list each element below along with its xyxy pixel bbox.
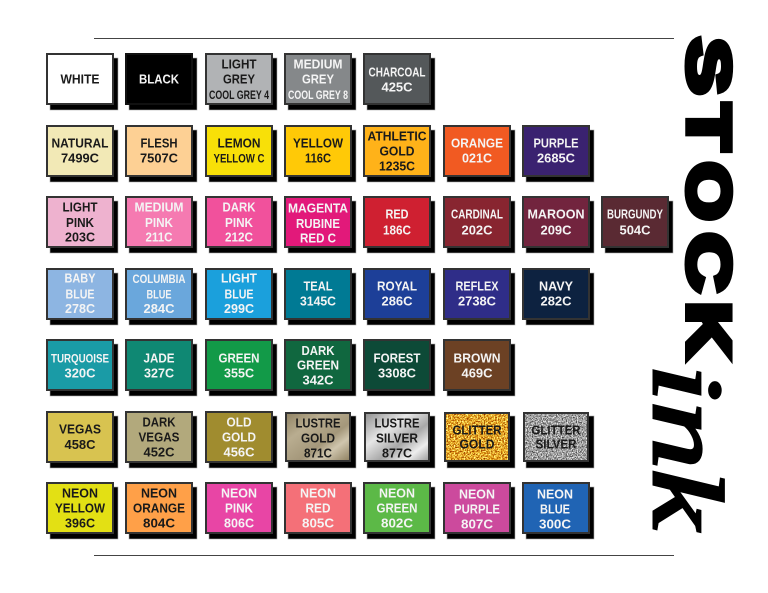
swatch: lustre silver: 877C [382, 446, 413, 460]
swatch: medium grey [285, 54, 356, 110]
swatch: dark pink: 212C [225, 230, 254, 244]
swatch: athletic gold [364, 126, 435, 182]
swatch: old gold: GOLD [222, 430, 256, 444]
swatch: royal: ROYAL [377, 278, 417, 294]
swatch: teal: TEAL [304, 278, 333, 294]
swatch: flesh [126, 126, 197, 182]
swatch: jade: 327C [144, 366, 175, 380]
wordmark: STOCK: T [675, 104, 742, 150]
wordmark: STOCK: K [675, 302, 742, 358]
swatch: neon blue [523, 483, 594, 539]
swatch: dark pink: PINK [225, 215, 254, 230]
swatch: neon green: 802C [381, 516, 414, 530]
swatch: neon purple: PURPLE [454, 502, 500, 516]
swatch: yellow [285, 126, 356, 182]
swatch: neon blue: BLUE [540, 502, 570, 516]
swatch: burgundy: 504C [620, 222, 651, 238]
swatch: athletic gold: GOLD [380, 144, 414, 158]
swatch: neon pink [206, 483, 277, 539]
swatch: light blue: BLUE [224, 286, 254, 302]
swatch: magenta rubine red [285, 197, 356, 253]
swatch: magenta rubine red: RED C [300, 230, 337, 246]
swatch: teal [285, 269, 356, 325]
swatch: neon blue: 300C [539, 516, 572, 532]
swatch: reflex: REFLEX [456, 278, 499, 294]
swatch: dark green: 342C [302, 372, 334, 388]
swatch: cardinal: 202C [462, 222, 493, 238]
swatch: neon orange: 804C [143, 516, 176, 530]
swatch: brown: BROWN [454, 350, 500, 366]
swatch: red: RED [386, 206, 408, 222]
wordmark: STOCK: O [675, 162, 741, 220]
swatch: medium grey: GREY [302, 72, 334, 86]
swatch: vegas: VEGAS [59, 422, 101, 436]
swatch: baby blue: 278C [65, 301, 96, 316]
swatch: neon purple: 807C [461, 516, 494, 532]
swatch: neon purple: NEON [459, 486, 495, 502]
swatch: orange [444, 126, 515, 182]
swatch: maroon: MAROON [528, 206, 584, 222]
swatch: baby blue: BLUE [66, 286, 95, 302]
swatch: glitter gold: GLITTER [452, 422, 502, 438]
swatch: old gold [206, 412, 277, 468]
swatch: red [364, 197, 435, 253]
swatch: light grey: COOL GREY 4 [209, 88, 269, 102]
wordmark: STOCK: S [675, 38, 742, 94]
swatch: yellow: 116C [305, 150, 332, 166]
swatch: dark pink [206, 197, 277, 253]
swatch: reflex [444, 269, 515, 325]
swatch: purple [523, 126, 594, 182]
swatch: burgundy [602, 197, 673, 253]
swatch: cardinal: CARDINAL [451, 206, 503, 222]
swatch: neon pink: 806C [224, 516, 255, 530]
swatch: columbia blue: BLUE [146, 288, 172, 302]
swatch: forest: FOREST [374, 350, 421, 366]
swatch: yellow: YELLOW [293, 136, 344, 150]
swatch: neon red: NEON [300, 486, 336, 500]
swatch: glitter silver: GLITTER [532, 422, 581, 438]
swatch: medium pink: PINK [145, 215, 174, 230]
swatch: jade: JADE [144, 350, 175, 366]
swatch: columbia blue: 284C [144, 301, 175, 316]
bottom rule [94, 555, 674, 556]
swatch: dark green: GREEN [297, 358, 339, 372]
swatch: neon green: NEON [379, 486, 415, 500]
swatch: medium pink: 211C [146, 230, 173, 244]
swatch: lustre gold: 871C [304, 446, 333, 460]
swatch: lustre silver [365, 413, 435, 468]
swatch: glitter gold [445, 413, 515, 468]
swatch: jade [126, 340, 197, 396]
swatch: royal [364, 269, 435, 325]
top rule [94, 38, 674, 39]
swatch: light blue: 299C [224, 301, 255, 316]
swatch: light pink: 203C [65, 230, 96, 244]
swatch: vegas: 458C [64, 437, 96, 452]
swatch: neon yellow: 396C [65, 516, 96, 530]
swatch: natural [47, 126, 118, 182]
swatch: forest [364, 340, 435, 396]
swatch: neon yellow: YELLOW [55, 500, 106, 516]
swatch: orange: ORANGE [451, 136, 503, 150]
swatch: magenta rubine red: RUBINE [296, 216, 340, 231]
swatch: baby blue: BABY [64, 270, 96, 286]
swatch: lustre gold: LUSTRE [296, 416, 341, 430]
swatch: medium pink [126, 197, 197, 253]
swatch: dark green [285, 340, 356, 396]
swatch: brown: 469C [462, 366, 493, 380]
swatch: athletic gold: ATHLETIC [368, 128, 427, 144]
swatch: neon yellow: NEON [62, 486, 98, 500]
swatch: lustre silver: SILVER [376, 430, 419, 446]
swatch: black: BLACK [139, 72, 180, 86]
swatch: maroon [523, 197, 594, 253]
swatch: charcoal [364, 54, 435, 110]
swatch: navy: NAVY [539, 278, 573, 294]
swatch: dark vegas: DARK [142, 414, 176, 430]
swatch: light grey: LIGHT [222, 56, 257, 72]
swatch: baby blue [47, 269, 118, 325]
swatch: navy: 282C [540, 294, 572, 308]
swatch: light pink [47, 197, 118, 253]
swatch: charcoal: 425C [382, 80, 413, 94]
swatch: teal: 3145C [300, 294, 337, 308]
swatch: medium grey: COOL GREY 8 [288, 88, 348, 102]
swatch: neon pink: PINK [225, 500, 254, 516]
swatch: old gold: OLD [226, 414, 252, 430]
swatch: light grey: GREY [223, 72, 255, 86]
wordmark: ink script: ink [632, 364, 743, 531]
swatch: neon green [364, 483, 435, 539]
swatch: dark vegas [126, 412, 197, 468]
swatch: columbia blue [126, 269, 197, 325]
swatch: neon orange: NEON [141, 486, 177, 500]
swatch: light blue [206, 269, 277, 325]
swatch: dark vegas: 452C [144, 444, 175, 460]
swatch: burgundy: BURGUNDY [607, 206, 663, 222]
swatch: flesh: 7507C [140, 150, 179, 166]
swatch: forest: 3308C [378, 366, 417, 380]
swatch: magenta rubine red: MAGENTA [288, 200, 349, 216]
swatch: natural: NATURAL [52, 136, 109, 150]
swatch: dark pink: DARK [222, 200, 256, 214]
swatch: glitter silver [524, 413, 594, 468]
swatch: red: 186C [383, 222, 412, 238]
swatch: neon yellow [47, 483, 118, 539]
swatch: neon red: 805C [302, 516, 335, 530]
swatch: lemon yellow: LEMON [218, 136, 260, 150]
swatch: old gold: 456C [224, 444, 255, 460]
wordmark: STOCK: C [675, 233, 742, 292]
swatch: purple: 2685C [537, 150, 576, 166]
swatch: neon purple [444, 483, 515, 539]
swatch: green: GREEN [218, 350, 260, 366]
swatch: reflex: 2738C [458, 294, 497, 308]
swatch: neon red [285, 483, 356, 539]
swatch: turquoise: 320C [64, 366, 96, 380]
swatch: lustre gold: GOLD [301, 430, 335, 446]
swatch: royal: 286C [382, 294, 413, 308]
swatch: brown [444, 340, 515, 396]
swatch: cardinal [444, 197, 515, 253]
swatch: neon blue: NEON [537, 486, 573, 502]
swatch: green: 355C [224, 366, 255, 380]
swatch: light blue: LIGHT [221, 270, 257, 286]
swatch: neon orange: ORANGE [133, 500, 185, 516]
swatch: dark vegas: VEGAS [138, 430, 180, 444]
swatch: lustre gold [286, 413, 356, 468]
swatch: navy [523, 269, 594, 325]
swatch: black [126, 54, 197, 110]
swatch: natural: 7499C [61, 150, 100, 166]
swatch: glitter gold: GOLD [460, 436, 494, 452]
swatch: columbia blue: COLUMBIA [132, 272, 186, 286]
swatch: charcoal: CHARCOAL [368, 64, 426, 80]
swatch: purple: PURPLE [534, 136, 579, 150]
swatch: white: WHITE [60, 72, 100, 86]
swatch: neon green: GREEN [376, 500, 418, 516]
swatch: maroon: 209C [540, 222, 572, 238]
swatch: green [206, 340, 277, 396]
swatch: dark green: DARK [302, 343, 335, 358]
swatch: light pink: LIGHT [62, 200, 98, 214]
wordmark: STOCK [675, 38, 742, 358]
swatch: lemon yellow: YELLOW C [214, 152, 265, 166]
swatch: lemon yellow [206, 126, 277, 182]
swatch: neon orange [126, 483, 197, 539]
swatch: vegas [47, 412, 118, 468]
swatch: neon red: RED [306, 500, 330, 516]
swatch: turquoise: TURQUOISE [51, 352, 109, 366]
swatch: light pink: PINK [66, 215, 95, 230]
swatch: turquoise [47, 340, 118, 396]
swatch: neon pink: NEON [221, 486, 257, 500]
swatch: flesh: FLESH [140, 136, 178, 150]
swatch: light grey [206, 54, 277, 110]
swatch: medium grey: MEDIUM [294, 56, 342, 72]
swatch: medium pink: MEDIUM [134, 200, 184, 214]
swatch: athletic gold: 1235C [379, 158, 416, 174]
swatch: glitter silver: SILVER [536, 436, 577, 452]
swatch: orange: 021C [462, 150, 493, 166]
swatch: white [47, 54, 118, 110]
swatch: lustre silver: LUSTRE [374, 416, 420, 430]
